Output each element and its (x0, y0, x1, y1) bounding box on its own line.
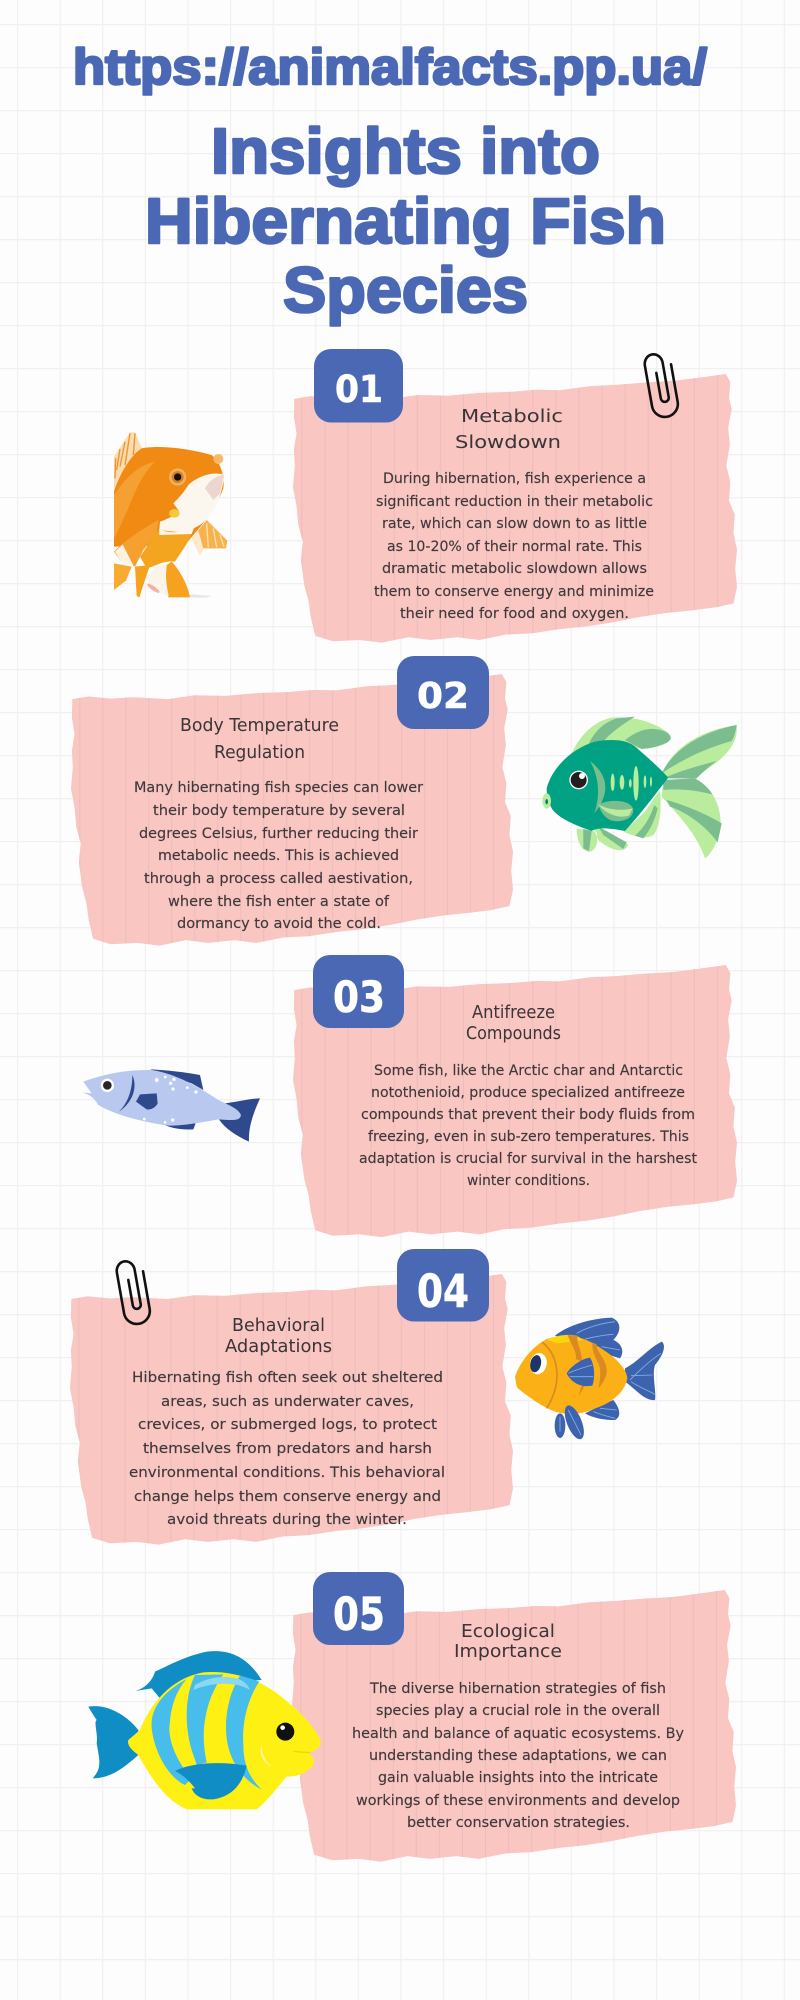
body text 5 (352, 1680, 684, 1831)
body text 4: areas, such as underwater caves, (161, 1393, 414, 1410)
body text 4: avoid threats during the winter. (167, 1511, 407, 1528)
body text 1: their need for food and oxygen. (400, 605, 629, 622)
heading 2: Body Temperature (180, 715, 339, 736)
badge 03 (313, 955, 404, 1028)
badge 04: 04 (417, 1265, 469, 1318)
body text 1: as 10-20% of their normal rate. This (387, 538, 642, 555)
heading 4 (225, 1315, 332, 1357)
badge 02 (397, 656, 489, 729)
body text 3: compounds that prevent their body fluids from (361, 1106, 695, 1123)
panel 2: body temperature regulation (71, 656, 513, 946)
torn paper 4 (70, 1274, 513, 1545)
heading 4: Adaptations (225, 1336, 332, 1357)
body text 1: them to conserve energy and minimize (374, 583, 654, 600)
panel 5: ecological importance (292, 1572, 736, 1862)
body text 5: species play a crucial role in the overall (376, 1702, 660, 1719)
body text 3: adaptation is crucial for survival in the harshest (359, 1150, 697, 1167)
body text 2: Many hibernating fish species can lower (134, 779, 423, 796)
body text 5: The diverse hibernation strategies of fish (369, 1680, 666, 1697)
badge 02: 02 (417, 676, 469, 717)
heading 5: Ecological (461, 1621, 555, 1642)
body text 2: their body temperature by several (153, 802, 405, 819)
icon: paperclip 2 (115, 1258, 152, 1326)
heading 1 (455, 406, 563, 453)
badge 04 (397, 1249, 489, 1322)
body text 3: notothenioid, produce specialized antifreeze (371, 1084, 685, 1101)
panel 4: behavioral adaptations (70, 1249, 513, 1545)
panel 3: antifreeze compounds (293, 955, 737, 1237)
body text 4: Hibernating fish often seek out sheltered (132, 1369, 443, 1386)
torn paper 1 (293, 374, 737, 643)
body text 5: workings of these environments and develop (356, 1792, 680, 1809)
heading 1: Metabolic (461, 406, 563, 427)
body text 2: through a process called aestivation, (144, 870, 413, 887)
body text 5: understanding these adaptations, we can (369, 1747, 667, 1764)
heading 4: Behavioral (232, 1315, 325, 1336)
panel 1: metabolic slowdown (293, 349, 737, 643)
heading 3: Antifreeze (472, 1002, 555, 1023)
badge 05: 05 (333, 1588, 385, 1641)
body text 3 (359, 1062, 697, 1189)
torn paper 5 (292, 1590, 736, 1862)
body text 4 (129, 1369, 445, 1528)
heading 2 (180, 715, 339, 763)
body text 5: better conservation strategies. (407, 1814, 630, 1831)
body text 4: environmental conditions. This behavioral (129, 1464, 445, 1481)
body text 4: crevices, or submerged logs, to protect (138, 1416, 437, 1433)
badge 05 (313, 1572, 404, 1645)
badge 01: 01 (335, 368, 383, 411)
title: Hibernating Fish (145, 185, 666, 257)
body text 5: health and balance of aquatic ecosystems. By (352, 1725, 684, 1742)
body text 4: change helps them conserve energy and (134, 1488, 441, 1505)
title: Species (283, 254, 528, 326)
body text 2 (134, 779, 423, 932)
body text 4: themselves from predators and harsh (143, 1440, 432, 1457)
heading 3 (466, 1002, 561, 1044)
body text 1: significant reduction in their metabolic (376, 493, 653, 510)
torn paper 3 (293, 965, 737, 1237)
body text 2: where the fish enter a state of (168, 893, 390, 910)
icon: goldfish (114, 432, 227, 598)
body text 2: metabolic needs. This is achieved (158, 847, 399, 864)
body text 1: During hibernation, fish experience a (383, 470, 646, 487)
badge 03: 03 (333, 973, 385, 1023)
heading 2: Regulation (214, 742, 305, 763)
body text 2: degrees Celsius, further reducing their (139, 825, 418, 842)
torn paper 2 (71, 674, 513, 946)
body text 3: winter conditions. (467, 1172, 590, 1189)
body text 3: freezing, even in sub-zero temperatures. This (368, 1128, 689, 1145)
body text 1: dramatic metabolic slowdown allows (382, 560, 647, 577)
heading 1: Slowdown (455, 432, 561, 453)
body text 3: Some fish, like the Arctic char and Antarctic (374, 1062, 683, 1079)
badge 01 (314, 349, 403, 422)
title (145, 115, 666, 326)
heading 5 (454, 1621, 562, 1662)
icon: green fish (542, 717, 737, 858)
body text 1 (374, 470, 654, 622)
heading 3: Compounds (466, 1023, 561, 1044)
icon: blue fish (82, 1069, 260, 1142)
body text 2: dormancy to avoid the cold. (177, 915, 381, 932)
icon: paperclip 1 (643, 351, 680, 419)
title: Insights into (211, 115, 600, 187)
heading 5: Importance (454, 1641, 562, 1662)
icon: orange fish (515, 1318, 664, 1442)
url heading: https://animalfacts.pp.ua/ (73, 39, 707, 95)
body text 1: rate, which can slow down to as little (382, 515, 647, 532)
body text 5: gain valuable insights into the intricate (378, 1769, 658, 1786)
icon: yellow fish (88, 1651, 321, 1809)
